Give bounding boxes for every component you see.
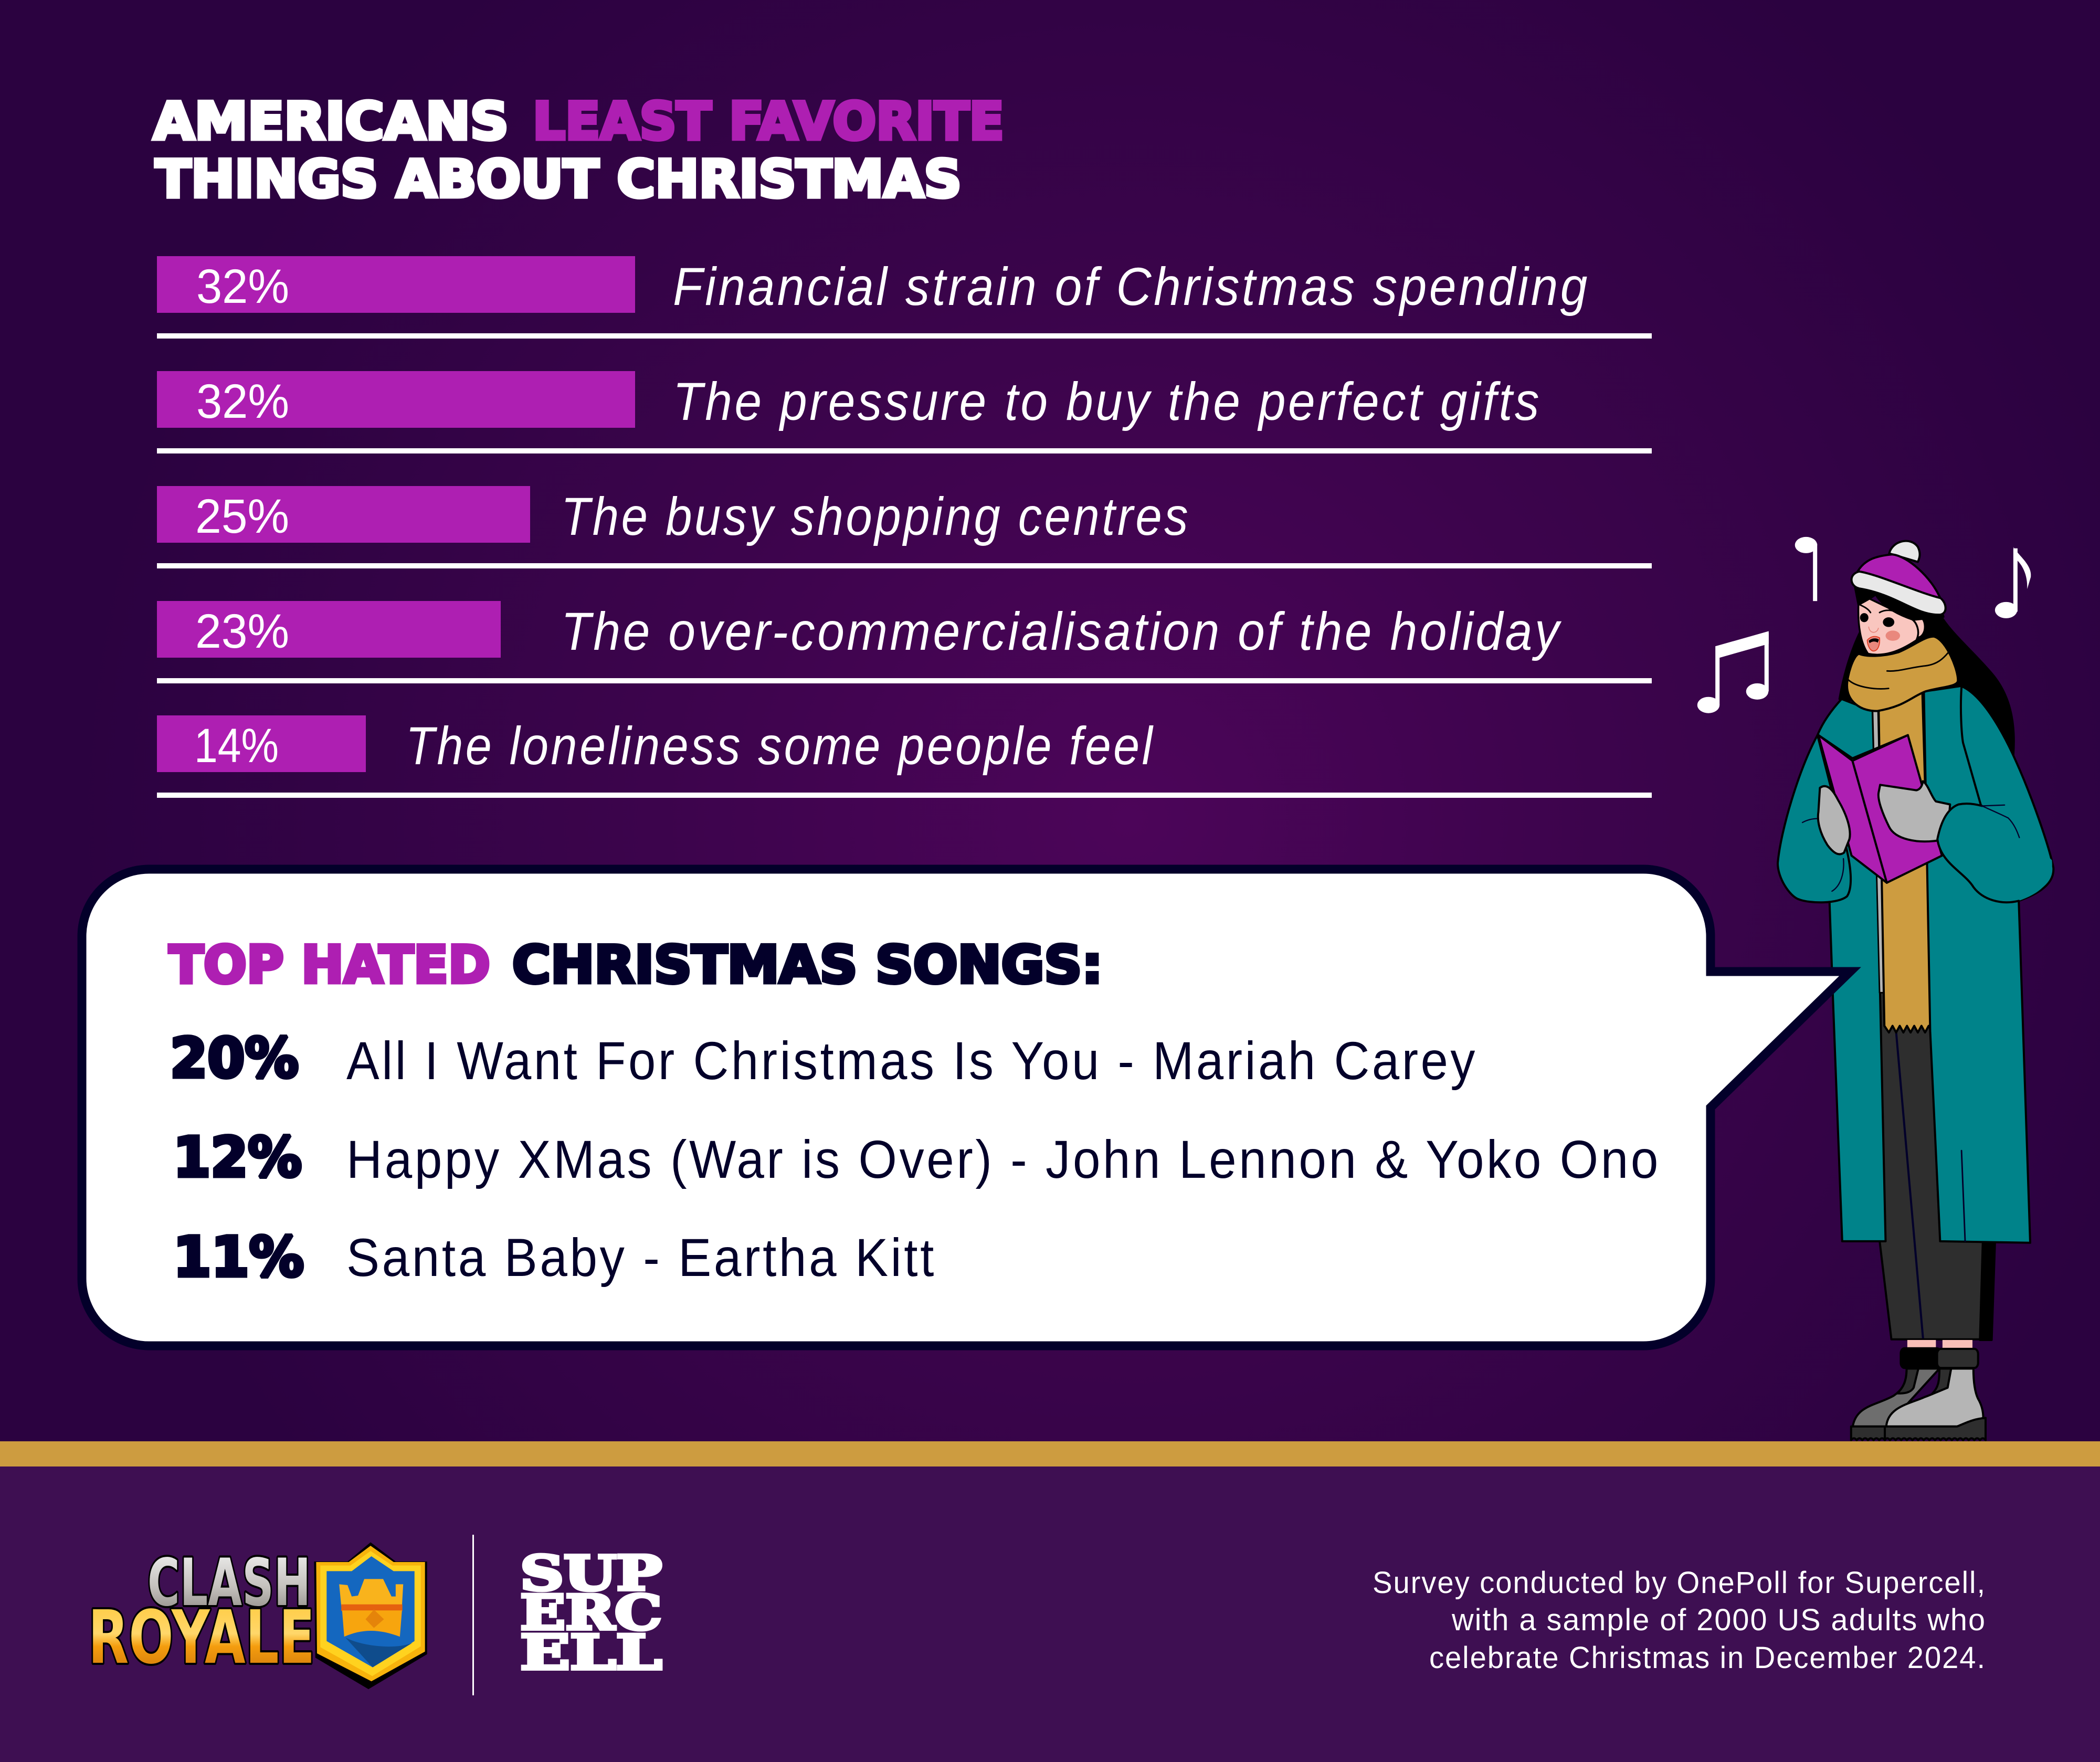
coat left panel	[1818, 699, 1885, 1241]
row: financial strain 32%: Financial strain of Christmas spending	[673, 257, 1590, 316]
logo: Supercell: ERC	[520, 1585, 662, 1641]
shield	[314, 1542, 427, 1689]
upper body	[1697, 537, 2053, 1243]
left sleeve	[1778, 735, 1851, 902]
title: THINGS ABOUT CHRISTMAS	[155, 150, 962, 209]
crown	[339, 1579, 403, 1606]
fringe	[1854, 585, 1944, 620]
song 2: Happy XMas (War is Over) - John Lennon & Yoko Ono	[346, 1130, 1661, 1189]
logo: Supercell: SUP	[520, 1546, 662, 1601]
row: perfect gifts 32%: The pressure to buy the perfect gifts	[673, 372, 1542, 431]
zip and hanging scarf	[1873, 691, 1932, 1032]
right cuff	[1937, 804, 2052, 902]
title	[153, 92, 1004, 209]
row: financial strain 32%: 32%	[196, 260, 289, 313]
survey note: with a sample of 2000 US adults who	[1451, 1603, 1986, 1637]
hat	[1852, 541, 1946, 615]
long hair	[1840, 618, 2014, 755]
row: over-commercialisation 23%: The over-commercialisation of the holiday	[561, 602, 1562, 661]
wordmark: ROYALE	[88, 1595, 315, 1681]
song 1: All I Want For Christmas Is You - Mariah Carey	[346, 1031, 1478, 1091]
logo: Supercell: ELL	[520, 1625, 662, 1681]
row: perfect gifts 32%: 32%	[196, 375, 289, 428]
song 3	[173, 1225, 936, 1289]
title: LEAST FAVORITE	[533, 92, 1004, 152]
wordmark	[88, 1545, 315, 1681]
logo: Clash Royale	[88, 1542, 427, 1689]
song 2: 12%	[173, 1125, 302, 1189]
bar chart: least favorite things	[157, 256, 1652, 798]
coat right panel and sleeve	[1924, 686, 2053, 1243]
song 3: 11%	[173, 1225, 304, 1289]
row: shopping centres 25%: 25%	[195, 490, 289, 543]
bubble shape	[82, 869, 1850, 1346]
survey note: celebrate Christmas in December 2024.	[1429, 1641, 1986, 1675]
speech bubble: top hated Christmas songs	[82, 869, 1850, 1346]
row: shopping centres 25%: The busy shopping centres	[561, 487, 1190, 546]
footer band	[0, 1466, 2100, 1762]
row: over-commercialisation 23%	[157, 601, 1652, 683]
divider	[472, 1535, 474, 1695]
row: perfect gifts 32%	[157, 371, 1652, 453]
title: AMERICANS	[153, 92, 509, 152]
gold floor strip	[0, 1441, 2100, 1466]
face	[1859, 598, 1925, 655]
wordmark: CLASH	[147, 1545, 311, 1621]
music notes	[1697, 537, 2031, 713]
logo: Supercell	[520, 1546, 662, 1681]
scarf	[1847, 637, 1958, 711]
bubble heading	[169, 935, 1103, 995]
bubble heading: TOP HATED	[169, 935, 490, 995]
song 3: Santa Baby - Eartha Kitt	[346, 1228, 936, 1288]
song 1: 20%	[170, 1026, 299, 1090]
left mitten	[1818, 786, 1850, 854]
row: shopping centres 25%	[157, 486, 1652, 568]
survey note	[1373, 1566, 1986, 1675]
row: financial strain 32%	[157, 256, 1652, 339]
row: loneliness 14%: The loneliness some people feel	[406, 716, 1155, 776]
songbook	[1818, 735, 1942, 883]
lower legs and boots	[1851, 971, 1995, 1440]
row: loneliness 14%	[157, 715, 1652, 798]
row: loneliness 14%: 14%	[194, 719, 279, 773]
bubble heading: CHRISTMAS SONGS:	[512, 935, 1103, 995]
right mitten	[1879, 781, 1950, 841]
illustration: carol singer	[1697, 537, 2053, 1440]
row: over-commercialisation 23%: 23%	[195, 605, 289, 658]
survey note: Survey conducted by OnePoll for Supercell,	[1373, 1566, 1986, 1600]
